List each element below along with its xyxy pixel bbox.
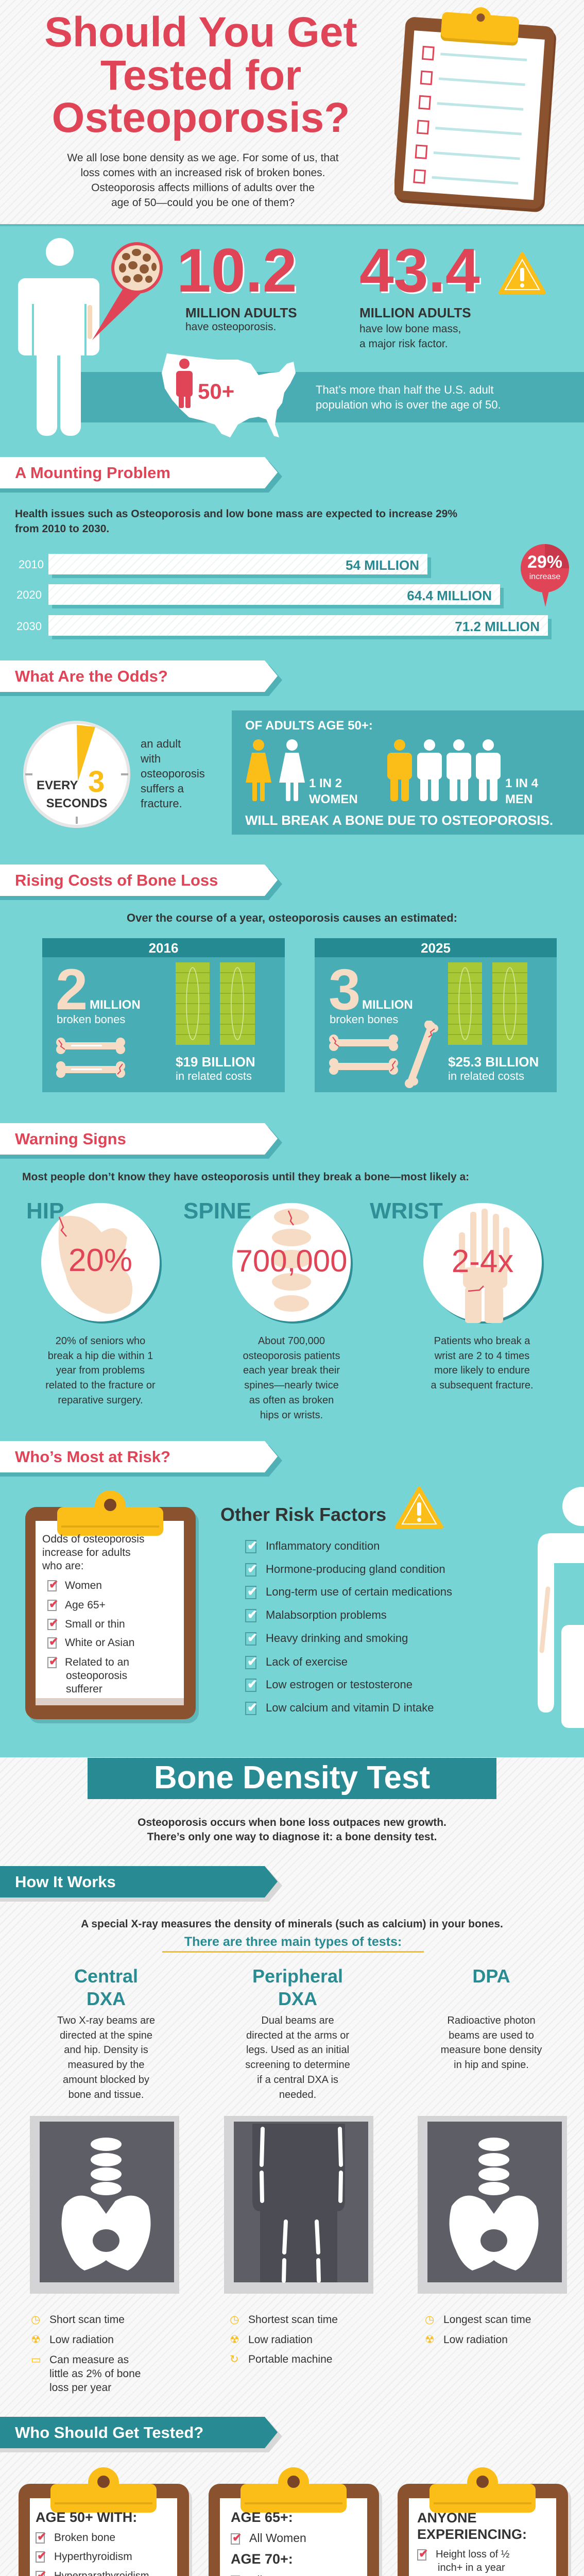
panel: 2016 costs: $19 BILLION bbox=[176, 1054, 255, 1070]
bar chart bbox=[16, 554, 552, 639]
list: other risk factors: ✔ bbox=[247, 1701, 257, 1715]
panel: odds of adults 50+: 1 IN 4 bbox=[505, 776, 538, 790]
clock caption bbox=[141, 737, 205, 810]
list: other risk factors: ✔ bbox=[247, 1608, 257, 1622]
list: central DXA features: Short scan time bbox=[49, 2314, 125, 2326]
column: Central DXA: Central bbox=[74, 1965, 138, 1987]
panel: 2025 costs bbox=[315, 938, 557, 1092]
column: Central DXA: measured by the bbox=[68, 2059, 144, 2071]
icon: spine circle: 700,000 bbox=[236, 1244, 347, 1278]
icon: large person with bone bbox=[18, 238, 163, 436]
stat: 43.4 million: 43.4 bbox=[359, 236, 480, 305]
panel: odds of adults 50+: WILL BREAK A BONE DUE TO OSTEOPOROSIS. bbox=[245, 812, 553, 828]
column: Central DXA: bone and tissue. bbox=[68, 2089, 144, 2100]
column: Peripheral DXA: Peripheral bbox=[252, 1965, 343, 1987]
callout: 29% increase pin: 29% bbox=[527, 552, 562, 572]
panel: clipboard age 50+ bbox=[18, 2466, 193, 2576]
mounting problem text: Health issues such as Osteoporosis and low bone mass are expected to increase 29% bbox=[15, 508, 457, 520]
banner: Rising Costs of Bone Loss bbox=[0, 865, 282, 900]
banner: Warning Signs bbox=[0, 1123, 282, 1159]
list: central DXA features: Low radiation bbox=[49, 2334, 114, 2346]
icon: clock every 3 seconds: SECONDS bbox=[46, 796, 107, 810]
icon: hip circle: HIP bbox=[26, 1198, 64, 1224]
panel: 2016 costs: broken bones bbox=[57, 1013, 125, 1026]
icon: broken bones bbox=[56, 1038, 125, 1078]
mounting problem text: from 2010 to 2030. bbox=[15, 523, 109, 535]
panel: 2025 costs: 2025 bbox=[421, 940, 451, 956]
icon: spine circle: SPINE bbox=[183, 1198, 251, 1224]
banner: A Mounting Problem: A Mounting Problem bbox=[15, 464, 170, 482]
banner: A Mounting Problem bbox=[0, 457, 282, 493]
list: central DXA features: loss per year bbox=[49, 2382, 111, 2394]
panel: 2025 costs: 3 bbox=[329, 957, 360, 1022]
intro paragraph: We all lose bone density as we age. For some of us, that bbox=[67, 152, 339, 164]
icon: hip circle: 20% bbox=[68, 1243, 132, 1278]
panel: clipboard age 65+/70+: ✔ bbox=[232, 2531, 242, 2544]
list: other risk factors: Low estrogen or testosterone bbox=[266, 1678, 413, 1691]
panel: clipboard anyone experiencing bbox=[397, 2466, 572, 2576]
panel: clipboard age 50+: Hyperthyroidism bbox=[54, 2551, 132, 2563]
header background bbox=[0, 0, 584, 224]
list: peripheral DXA features: Low radiation bbox=[248, 2334, 313, 2346]
panel: clipboard anyone experiencing: EXPERIENCING: bbox=[417, 2527, 527, 2542]
column: DPA: measure bone density bbox=[441, 2044, 542, 2056]
icon: warning triangle bbox=[395, 1486, 443, 1529]
callout: 29% increase pin: increase bbox=[529, 572, 560, 581]
list: DPA features: Longest scan time bbox=[443, 2314, 531, 2326]
icon: spine circle bbox=[183, 1198, 353, 1324]
panel: risk clipboard: White or Asian bbox=[65, 1637, 134, 1649]
how it works intro: A special X-ray measures the density of minerals (such as calcium) in your bones. bbox=[81, 1918, 503, 1930]
panel: 2016 costs: 2 bbox=[56, 957, 88, 1022]
icon: wrist circle bbox=[370, 1198, 544, 1324]
50+ caption: That’s more than half the U.S. adult bbox=[316, 383, 494, 396]
panel: clipboard age 65+/70+: AGE 70+: bbox=[231, 2551, 293, 2567]
text: spine fact: as often as broken bbox=[249, 1395, 334, 1406]
banner: Who's Most at Risk bbox=[0, 1441, 282, 1477]
panel: odds of adults 50+: OF ADULTS AGE 50+: bbox=[245, 719, 373, 733]
intro paragraph bbox=[67, 152, 339, 209]
panel: risk clipboard: Small or thin bbox=[65, 1618, 125, 1630]
panel: clipboard age 65+/70+: AGE 65+: bbox=[231, 2510, 293, 2525]
heading: Other Risk Factors: Other Risk Factors bbox=[220, 1504, 386, 1525]
text: hip fact bbox=[45, 1335, 156, 1406]
stat: 10.2 million: 10.2 bbox=[178, 238, 299, 307]
list: peripheral DXA features: Shortest scan time bbox=[248, 2314, 338, 2326]
subheading: three types bbox=[162, 1935, 424, 1953]
panel: risk clipboard: Women bbox=[65, 1580, 102, 1591]
banner: How It Works: How It Works bbox=[15, 1873, 116, 1891]
list: DPA features: ◷ bbox=[425, 2314, 434, 2326]
column: Peripheral DXA bbox=[224, 1965, 373, 2294]
text: wrist fact: a subsequent fracture. bbox=[431, 1380, 534, 1391]
text: hip fact: 20% of seniors who bbox=[56, 1335, 145, 1347]
icon: men figures bbox=[387, 739, 501, 801]
list: peripheral DXA features: ↻ bbox=[230, 2353, 239, 2365]
bar chart: 2020 bbox=[16, 588, 42, 601]
column: DPA: in hip and spine. bbox=[454, 2059, 529, 2071]
panel: risk clipboard: Age 65+ bbox=[65, 1599, 106, 1611]
panel: clipboard anyone experiencing: ANYONE bbox=[417, 2510, 477, 2526]
panel: 2025 costs: MILLION bbox=[362, 998, 413, 1012]
list: DPA features: ☢ bbox=[425, 2334, 435, 2346]
column: DPA bbox=[418, 1965, 567, 2294]
banner: Bone Density Test: Bone Density Test bbox=[154, 1760, 430, 1795]
list: other risk factors: Malabsorption problems bbox=[266, 1608, 387, 1621]
column: Peripheral DXA: legs. Used as an initial bbox=[246, 2044, 349, 2056]
column: DPA: beams are used to bbox=[449, 2030, 534, 2041]
text: spine fact: spines—nearly twice bbox=[244, 1380, 339, 1391]
panel: risk clipboard: ✔ bbox=[49, 1617, 58, 1630]
icon: wrist circle: WRIST bbox=[370, 1198, 443, 1224]
column: Peripheral DXA: Dual beams are bbox=[261, 2015, 334, 2026]
warning intro: Most people don’t know they have osteoporosis until they break a bone—most likely a: bbox=[22, 1171, 469, 1183]
list: other risk factors: ✔ bbox=[247, 1539, 257, 1553]
text: hip fact: related to the fracture or bbox=[45, 1380, 156, 1391]
panel: 2016 costs: MILLION bbox=[90, 998, 141, 1012]
panel: risk clipboard: ✔ bbox=[49, 1655, 58, 1668]
list: other risk factors: Hormone-producing gland condition bbox=[266, 1563, 445, 1575]
bar chart: 64.4 MILLION bbox=[407, 588, 492, 603]
text: spine fact: About 700,000 bbox=[258, 1335, 325, 1347]
column: DPA: Radioactive photon bbox=[447, 2015, 536, 2026]
title: Osteoporosis? bbox=[52, 94, 350, 141]
text: wrist fact bbox=[431, 1335, 534, 1391]
50+ caption bbox=[316, 383, 501, 411]
panel: 2025 costs: broken bones bbox=[330, 1013, 398, 1026]
title: Tested for bbox=[100, 52, 301, 99]
panel: 2025 costs: $25.3 BILLION bbox=[448, 1054, 539, 1070]
list: central DXA features: little as 2% of bone bbox=[49, 2368, 141, 2380]
panel: 2025 costs: in related costs bbox=[448, 1070, 524, 1082]
list: peripheral DXA features bbox=[230, 2314, 338, 2365]
banner: Warning Signs: Warning Signs bbox=[15, 1130, 126, 1148]
clock caption: suffers a bbox=[141, 782, 184, 795]
text: wrist fact: Patients who break a bbox=[434, 1335, 530, 1347]
list: other risk factors: ✔ bbox=[247, 1631, 257, 1645]
stat: 43.4 million bbox=[359, 236, 546, 350]
panel: clipboard age 50+: AGE 50+ WITH: bbox=[36, 2510, 137, 2525]
list: other risk factors: Lack of exercise bbox=[266, 1655, 348, 1668]
bar chart: 2030 bbox=[16, 620, 42, 633]
icon: hip circle bbox=[26, 1198, 162, 1324]
icon: three broken bones bbox=[329, 1021, 438, 1088]
column: Central DXA: and hip. Density is bbox=[64, 2044, 148, 2056]
panel: risk clipboard: osteoporosis bbox=[66, 1670, 127, 1682]
stat: 43.4 million: a major risk factor. bbox=[359, 338, 448, 350]
icon: x-ray spine and pelvis bbox=[30, 2116, 179, 2294]
icon: wrist circle: 2-4x bbox=[452, 1244, 513, 1279]
banner: What Are the Odds: What Are the Odds? bbox=[15, 667, 168, 685]
panel: odds of adults 50+: WOMEN bbox=[309, 792, 358, 806]
bar chart: 54 MILLION bbox=[346, 557, 419, 573]
panel: risk clipboard bbox=[25, 1490, 199, 1723]
panel: clipboard anyone experiencing: Height loss of ½ bbox=[436, 2549, 509, 2560]
column: Central DXA: amount blocked by bbox=[63, 2074, 149, 2086]
text: spine fact: hips or wrists. bbox=[260, 1410, 323, 1421]
text: spine fact: each year break their bbox=[243, 1365, 340, 1376]
banner: Who Should Get Tested bbox=[0, 2417, 282, 2452]
icon: header clipboard bbox=[394, 7, 556, 212]
bone density intro bbox=[138, 1817, 446, 1843]
list: other risk factors: Long-term use of certain medications bbox=[266, 1585, 452, 1598]
list: central DXA features: ☢ bbox=[31, 2334, 41, 2346]
list: other risk factors bbox=[245, 1539, 452, 1715]
text: hip fact: reparative surgery. bbox=[58, 1395, 143, 1406]
text: wrist fact: more likely to endure bbox=[434, 1365, 530, 1376]
icon: clock every 3 seconds: 3 bbox=[88, 765, 105, 799]
panel: clipboard age 50+: ✔ bbox=[37, 2530, 46, 2543]
list: other risk factors: ✔ bbox=[247, 1677, 257, 1691]
teal section background bbox=[0, 224, 584, 1757]
stat: 10.2 million: have osteoporosis. bbox=[185, 321, 276, 333]
panel: clipboard anyone experiencing: inch+ in a year bbox=[438, 2562, 505, 2573]
column: Peripheral DXA: screening to determine bbox=[245, 2059, 350, 2071]
panel: clipboard age 50+: ✔ bbox=[37, 2549, 46, 2562]
50+ strip bbox=[80, 372, 584, 422]
list: DPA features: Low radiation bbox=[443, 2334, 508, 2346]
list: DPA features bbox=[425, 2314, 531, 2346]
stat: 43.4 million: 43.4 bbox=[361, 238, 482, 307]
list: central DXA features: ◷ bbox=[31, 2314, 40, 2326]
icon: x-ray spine and pelvis bbox=[418, 2116, 567, 2294]
column: DPA: DPA bbox=[472, 1965, 510, 1987]
column: Central DXA: DXA bbox=[87, 1988, 126, 2009]
banner: What Are the Odds bbox=[0, 660, 282, 696]
text: hip fact: break a hip die within 1 bbox=[48, 1350, 153, 1362]
panel: risk clipboard: sufferer bbox=[66, 1683, 102, 1695]
icon: money stacks bbox=[448, 962, 527, 1045]
costs intro: Over the course of a year, osteoporosis causes an estimated: bbox=[127, 911, 457, 924]
panel: 2016 costs bbox=[42, 938, 285, 1092]
clock caption: osteoporosis bbox=[141, 767, 205, 780]
list: central DXA features bbox=[31, 2314, 141, 2394]
icon: money stacks bbox=[176, 962, 255, 1045]
mounting problem text bbox=[15, 508, 457, 535]
panel: odds of adults 50+: MEN bbox=[505, 792, 533, 806]
panel: risk clipboard: ✔ bbox=[49, 1598, 58, 1611]
50+ caption: population who is over the age of 50. bbox=[316, 398, 501, 411]
stat: 10.2 million: MILLION ADULTS bbox=[185, 305, 297, 320]
callout: 29% increase pin bbox=[521, 544, 569, 607]
banner: Rising Costs of Bone Loss: Rising Costs of Bone Loss bbox=[15, 871, 218, 889]
panel: clipboard anyone experiencing: ✔ bbox=[419, 2547, 428, 2560]
panel: odds of adults 50+ bbox=[232, 710, 584, 835]
bone density intro: There’s only one way to diagnose it: a bone density test. bbox=[147, 1831, 437, 1843]
panel: risk clipboard: increase for adults bbox=[42, 1547, 131, 1558]
list: other risk factors: ✔ bbox=[247, 1655, 257, 1669]
list: peripheral DXA features: ◷ bbox=[230, 2314, 239, 2326]
list: other risk factors: Heavy drinking and smoking bbox=[266, 1632, 408, 1645]
panel: risk clipboard: who are: bbox=[42, 1560, 84, 1572]
text: spine fact: osteoporosis patients bbox=[243, 1350, 340, 1362]
list: peripheral DXA features: ☢ bbox=[230, 2334, 239, 2346]
stat: 43.4 million: have low bone mass, bbox=[359, 323, 461, 335]
clock caption: an adult bbox=[141, 737, 181, 750]
text: hip fact: year from problems bbox=[56, 1365, 145, 1376]
icon: women figures bbox=[246, 739, 305, 801]
stat: 10.2 million: 10.2 bbox=[177, 236, 297, 305]
panel: clipboard age 65+/70+: All Women bbox=[249, 2531, 306, 2545]
bone density intro: Osteoporosis occurs when bone loss outpaces new growth. bbox=[138, 1817, 446, 1828]
banner: Who Should Get Tested: Who Should Get Tested? bbox=[15, 2424, 203, 2442]
panel: clipboard age 65+/70+ bbox=[208, 2466, 383, 2576]
title: Should You Get bbox=[44, 9, 357, 56]
column: Central DXA bbox=[30, 1965, 179, 2294]
panel: 2016 costs: 2016 bbox=[149, 940, 178, 956]
title bbox=[44, 9, 357, 141]
intro paragraph: loss comes with an increased risk of broken bones. bbox=[80, 167, 325, 179]
panel: odds of adults 50+: 1 IN 2 bbox=[309, 776, 342, 790]
icon: clock every 3 seconds bbox=[23, 721, 130, 828]
list: peripheral DXA features: Portable machine bbox=[248, 2353, 332, 2365]
list: other risk factors: Inflammatory condition bbox=[266, 1539, 380, 1552]
panel: risk clipboard: ✔ bbox=[49, 1578, 58, 1591]
intro paragraph: age of 50—could you be one of them? bbox=[111, 197, 295, 209]
panel: 2016 costs: in related costs bbox=[176, 1070, 252, 1082]
list: central DXA features: ▭ bbox=[31, 2354, 41, 2366]
icon: partial person right bbox=[538, 1487, 584, 1728]
icon: clock every 3 seconds: EVERY bbox=[37, 778, 78, 792]
column: Peripheral DXA: directed at the arms or bbox=[246, 2030, 349, 2041]
icon: US map with 50+: 50+ bbox=[198, 379, 234, 403]
list: other risk factors: ✔ bbox=[247, 1562, 257, 1576]
panel: risk clipboard: Odds of osteoporosis bbox=[42, 1533, 144, 1545]
subheading: three types: There are three main types of tests: bbox=[184, 1935, 402, 1949]
icon: x-ray limbs bbox=[224, 2116, 373, 2294]
column: Central DXA: directed at the spine bbox=[60, 2030, 152, 2041]
white section background bbox=[0, 1757, 584, 2576]
icon: warning triangle bbox=[499, 252, 546, 294]
bar chart: 71.2 MILLION bbox=[455, 619, 540, 634]
column: Peripheral DXA: needed. bbox=[279, 2089, 316, 2100]
icon: US map with 50+ bbox=[162, 353, 296, 437]
bar chart: 2010 bbox=[19, 558, 44, 571]
stat: 43.4 million: MILLION ADULTS bbox=[359, 305, 471, 320]
banner: How It Works bbox=[0, 1866, 282, 1902]
column: Peripheral DXA: if a central DXA is bbox=[257, 2074, 338, 2086]
banner: Bone Density Test bbox=[88, 1758, 496, 1799]
column: Central DXA: Two X-ray beams are bbox=[57, 2015, 155, 2026]
intro paragraph: Osteoporosis affects millions of adults over the bbox=[91, 182, 315, 194]
panel: risk clipboard: Related to an bbox=[65, 1656, 129, 1668]
panel: risk clipboard: ✔ bbox=[49, 1635, 58, 1648]
list: other risk factors: ✔ bbox=[247, 1585, 257, 1599]
text: wrist fact: wrist are 2 to 4 times bbox=[435, 1350, 529, 1362]
banner: Who's Most at Risk: Who’s Most at Risk? bbox=[15, 1448, 170, 1466]
column: Peripheral DXA: DXA bbox=[278, 1988, 317, 2009]
panel: clipboard age 50+: Broken bone bbox=[54, 2532, 115, 2544]
list: other risk factors: Low calcium and vitamin D intake bbox=[266, 1701, 434, 1714]
clock caption: with bbox=[141, 752, 161, 765]
text: spine fact bbox=[243, 1335, 340, 1421]
clock caption: fracture. bbox=[141, 797, 182, 810]
list: central DXA features: Can measure as bbox=[49, 2354, 129, 2366]
